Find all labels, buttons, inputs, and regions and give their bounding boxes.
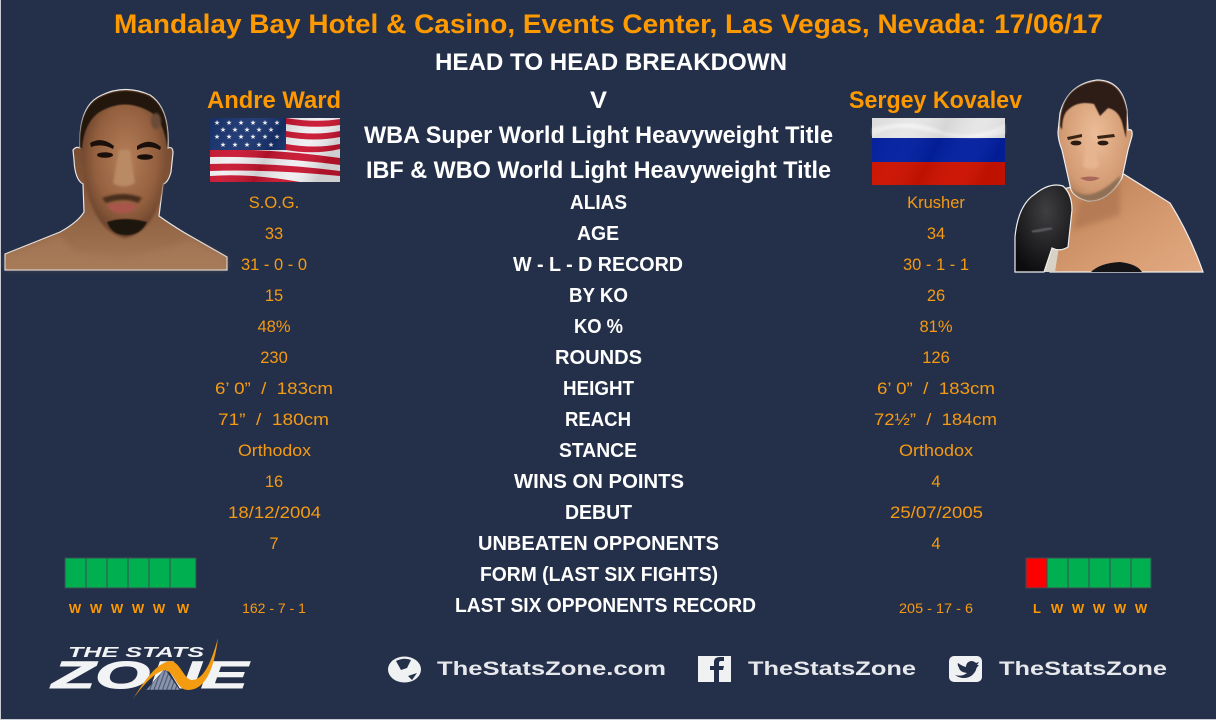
flag: USA: ★ — [268, 141, 274, 149]
row: by KO: 15 — [265, 287, 283, 305]
stats table — [215, 192, 997, 617]
row: height: 6’ 0” / 183cm — [215, 380, 333, 398]
row: unbeaten opponents: 4 — [931, 535, 941, 553]
row: alias: S.O.G. — [249, 194, 299, 212]
row: rounds — [260, 347, 950, 369]
flag: USA: ★ — [238, 133, 244, 141]
flag: USA: ★ — [220, 126, 226, 134]
row: KO percent — [257, 316, 953, 338]
form results: Kovalev: W — [1114, 601, 1127, 616]
row: KO percent: 81% — [919, 318, 953, 336]
flag: USA: ★ — [214, 133, 220, 141]
form bar: Kovalev — [1026, 558, 1151, 588]
row: record: W - L - D RECORD — [513, 254, 683, 276]
logo: The Stats Zone: ZONE — [50, 655, 251, 697]
title line: WBA: WBA Super World Light Heavyweight Title — [364, 122, 833, 149]
row: stance: STANCE — [559, 440, 637, 462]
logo: The Stats Zone — [50, 638, 251, 699]
flag: USA: ★ — [262, 133, 268, 141]
row: age: 34 — [927, 225, 945, 243]
logo: The Stats Zone: THE STATS — [68, 644, 204, 661]
row: alias: Krusher — [907, 194, 965, 212]
form bar: Ward — [65, 558, 196, 588]
row: reach: REACH — [565, 409, 631, 431]
form results: Ward: W — [177, 601, 190, 616]
portrait: Sergey Kovalev — [1015, 80, 1203, 272]
form results: Ward: W — [111, 601, 124, 616]
row: alias — [249, 192, 965, 214]
row: reach — [218, 409, 997, 431]
form results: Kovalev — [1033, 601, 1148, 616]
flag: USA: ★ — [232, 141, 238, 149]
icon: twitter — [949, 656, 982, 682]
form results: Ward: W — [153, 601, 166, 616]
icon: globe — [388, 656, 421, 682]
flag: USA: ★ — [250, 119, 256, 127]
row: reach: 72½” / 184cm — [874, 411, 997, 429]
row: rounds: ROUNDS — [555, 347, 642, 369]
player name: Andre Ward: Andre Ward — [207, 87, 341, 114]
flag: USA: ★ — [244, 141, 250, 149]
flag: USA: ★ — [268, 126, 274, 134]
row: rounds: 230 — [260, 349, 288, 367]
row: stance — [238, 440, 974, 462]
row: record: 31 - 0 - 0 — [241, 256, 307, 274]
player name: Sergey Kovalev: Sergey Kovalev — [849, 87, 1023, 114]
flag: Russia — [872, 118, 1005, 185]
row: wins on points: WINS ON POINTS — [514, 471, 684, 493]
flag: USA: ★ — [238, 119, 244, 127]
flag: USA: ★ — [214, 119, 220, 127]
form results: Kovalev: L — [1033, 601, 1041, 616]
row: stance: Orthodox — [238, 442, 312, 460]
row: by KO: 26 — [927, 287, 945, 305]
flag: USA: ★ — [262, 119, 268, 127]
row: stance: Orthodox — [899, 442, 974, 460]
flag: USA: ★ — [274, 133, 280, 141]
row: by KO — [265, 285, 945, 307]
form results: Ward: W — [132, 601, 145, 616]
row: debut: 25/07/2005 — [890, 504, 983, 522]
form results: Kovalev: W — [1072, 601, 1085, 616]
row: age — [265, 223, 945, 245]
row: last six opponents record: LAST SIX OPPONENTS RECORD — [455, 595, 756, 617]
footer text: twitter: TheStatsZone — [999, 659, 1167, 680]
row: height: HEIGHT — [563, 378, 634, 400]
row: age: AGE — [577, 223, 619, 245]
row: height — [215, 378, 995, 400]
row: KO percent: KO % — [574, 316, 623, 338]
row: debut — [228, 502, 983, 524]
row: record: 30 - 1 - 1 — [903, 256, 969, 274]
footer text: facebook: TheStatsZone — [748, 659, 916, 680]
flag: USA: ★ — [256, 141, 262, 149]
footer text: website: TheStatsZone.com — [437, 659, 666, 680]
title line: IBF and WBO: IBF & WBO World Light Heavyweight Title — [366, 157, 831, 184]
row: by KO: BY KO — [569, 285, 628, 307]
row: wins on points: 16 — [265, 473, 283, 491]
form results: Kovalev: W — [1135, 601, 1148, 616]
flag: USA: ★ — [256, 126, 262, 134]
row: wins on points: 4 — [931, 473, 941, 491]
row: last six opponents record: 205 - 17 - 6 — [899, 600, 973, 616]
row: debut: DEBUT — [565, 502, 632, 524]
flag: USA — [210, 118, 340, 182]
row: alias: ALIAS — [570, 192, 627, 214]
form results: Ward — [69, 601, 190, 616]
row: unbeaten opponents — [269, 533, 941, 555]
row: form label: FORM (LAST SIX FIGHTS) — [480, 564, 718, 586]
flag: USA: ★ — [226, 133, 232, 141]
row: last six opponents record: 162 - 7 - 1 — [242, 600, 306, 616]
row: wins on points — [265, 471, 941, 493]
flag: USA: ★ — [250, 133, 256, 141]
row: last six opponents record — [242, 595, 973, 617]
portrait: Andre Ward — [5, 90, 227, 270]
title: Mandalay Bay Hotel & Casino, Events Center, Las Vegas, Nevada: 17/06/17 — [114, 9, 1103, 39]
row: record — [241, 254, 969, 276]
icon: facebook — [698, 656, 731, 682]
flag: USA: ★ — [232, 126, 238, 134]
flag: USA: ★ — [274, 119, 280, 127]
flag: USA: ★ — [244, 126, 250, 134]
versus marker: V — [590, 87, 607, 114]
form results: Ward: W — [90, 601, 103, 616]
row: unbeaten opponents: 7 — [269, 535, 279, 553]
row: height: 6’ 0” / 183cm — [877, 380, 995, 398]
row: KO percent: 48% — [257, 318, 291, 336]
row: reach: 71” / 180cm — [218, 411, 329, 429]
row: unbeaten opponents: UNBEATEN OPPONENTS — [478, 533, 719, 555]
form results: Kovalev: W — [1051, 601, 1064, 616]
row: rounds: 126 — [922, 349, 950, 367]
flag: USA: ★ — [226, 119, 232, 127]
row: age: 33 — [265, 225, 283, 243]
heading: head to head breakdown: HEAD TO HEAD BREAKDOWN — [435, 49, 787, 76]
row: debut: 18/12/2004 — [228, 504, 321, 522]
flag: USA: ★ — [220, 141, 226, 149]
form results: Ward: W — [69, 601, 82, 616]
form results: Kovalev: W — [1093, 601, 1106, 616]
